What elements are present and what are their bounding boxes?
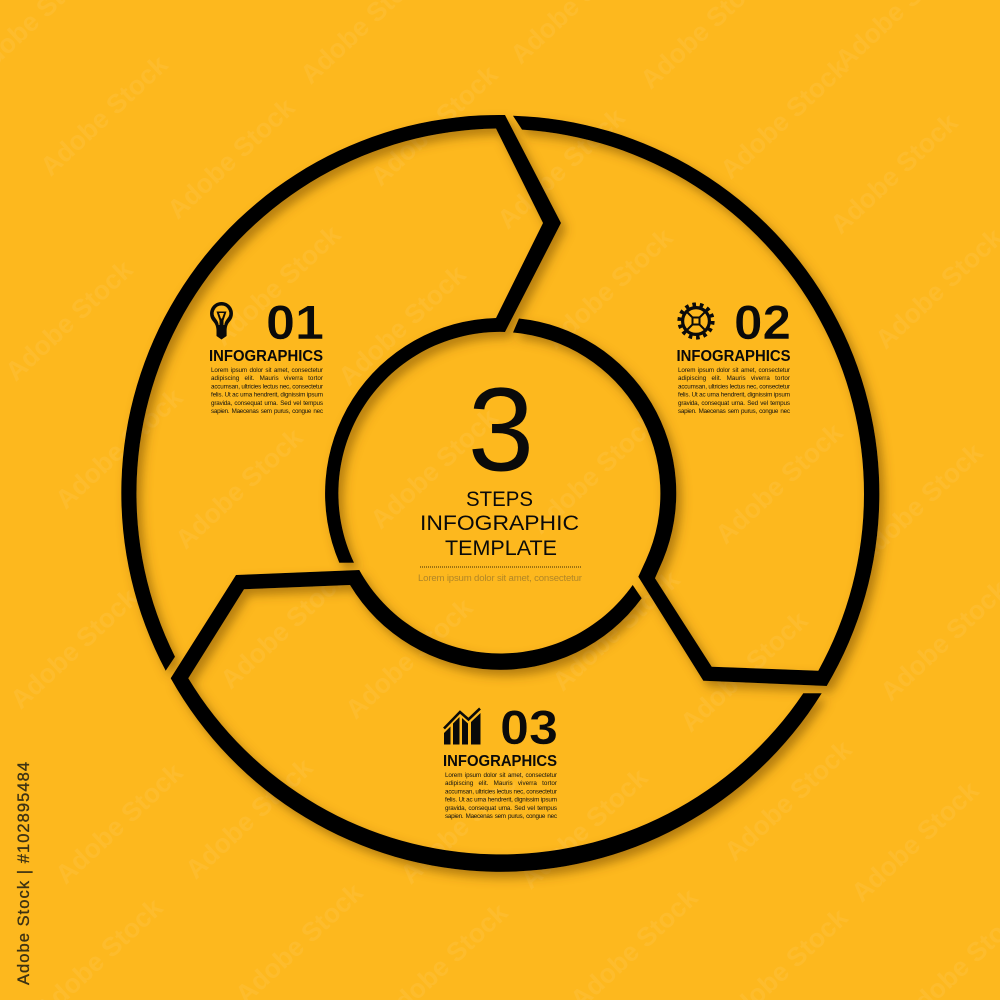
- watermark pattern: Adobe Stock: [49, 382, 189, 515]
- body text: adipiscing elit. Mauris viverra tortor: [211, 375, 323, 382]
- watermark pattern: Adobe Stock: [824, 107, 964, 240]
- watermark pattern: Adobe Stock: [364, 59, 504, 192]
- heading: INFOGRAPHICS: [443, 753, 557, 770]
- body text: gravida, consequat urna. Sed vel tempus: [445, 805, 557, 812]
- watermark pattern: Adobe Stock: [49, 757, 189, 890]
- body text: adipiscing elit. Mauris viverra tortor: [678, 375, 790, 382]
- body text: felis. Ut ac urna hendrerit, dignissim ipsum: [678, 392, 790, 399]
- heading: INFOGRAPHICS: [209, 348, 323, 365]
- segment outline: step 3: [171, 570, 822, 872]
- watermark pattern: Adobe Stock: [34, 49, 174, 182]
- title line: INFOGRAPHIC: INFOGRAPHIC: [420, 511, 579, 535]
- watermark pattern: Adobe Stock: [161, 92, 301, 225]
- watermark pattern: Adobe Stock: [524, 407, 664, 540]
- body text: sapien. Maecenas sem purus, congue nec: [678, 408, 790, 415]
- panel: step 2: [676, 297, 791, 415]
- watermark pattern: Adobe Stock: [364, 402, 504, 535]
- big number 3: 3: [468, 364, 534, 496]
- number 02: 02: [734, 297, 791, 350]
- body text: accumsan, ultricies lectus nec, consectetur: [445, 788, 557, 795]
- body text: Lorem ipsum dolor sit amet, consectetur: [211, 367, 323, 374]
- title line: TEMPLATE: TEMPLATE: [445, 536, 557, 560]
- watermark pattern: Adobe Stock: [339, 592, 479, 725]
- body text: gravida, consequat urna. Sed vel tempus: [211, 400, 323, 407]
- watermark pattern: Adobe Stock: [207, 219, 347, 352]
- watermark pattern: Adobe Stock: [709, 417, 849, 550]
- watermark pattern: Adobe Stock: [169, 422, 309, 555]
- segment outline: step 2: [513, 116, 879, 686]
- watermark pattern: Adobe Stock: [394, 757, 534, 890]
- icon: gear: [679, 304, 713, 338]
- body text: adipiscing elit. Mauris viverra tortor: [445, 780, 557, 787]
- panel: step 3: [443, 702, 558, 820]
- watermark pattern: Adobe Stock: [179, 752, 319, 885]
- watermark pattern: Adobe Stock: [845, 775, 985, 908]
- watermark pattern: Adobe Stock: [546, 564, 686, 697]
- body text: felis. Ut ac urna hendrerit, dignissim ipsum: [445, 797, 557, 804]
- watermark pattern: Adobe Stock: [849, 437, 989, 570]
- watermark pattern: Adobe Stock: [0, 254, 139, 387]
- body text: Lorem ipsum dolor sit amet, consectetur: [445, 772, 557, 779]
- watermark pattern: Adobe Stock: [718, 734, 858, 867]
- icon: rising bar chart: [444, 708, 480, 744]
- heading: INFOGRAPHICS: [676, 348, 790, 365]
- watermark pattern: Adobe Stock: [539, 222, 679, 355]
- body text: sapien. Maecenas sem purus, congue nec: [211, 408, 323, 415]
- body text: sapien. Maecenas sem purus, congue nec: [445, 813, 557, 820]
- watermark pattern: Adobe Stock: [4, 582, 144, 715]
- number 03: 03: [500, 702, 558, 755]
- title line: STEPS: STEPS: [466, 487, 533, 511]
- watermark pattern: Adobe Stock: [514, 762, 654, 895]
- body text: gravida, consequat urna. Sed vel tempus: [678, 400, 790, 407]
- subtitle: Lorem ipsum dolor sit amet, consectetur: [418, 573, 583, 584]
- watermark pattern: Adobe Stock: [714, 52, 854, 185]
- segment outline: step 1: [121, 115, 561, 671]
- body text: accumsan, ultricies lectus nec, consectetur: [678, 383, 790, 390]
- watermark pattern: Adobe Stock: [332, 259, 472, 392]
- body text: [678, 367, 790, 415]
- body text: accumsan, ultricies lectus nec, consectetur: [211, 383, 323, 390]
- body text: [445, 772, 557, 820]
- stock id label: Adobe Stock | #102895484: [15, 762, 33, 985]
- watermark pattern: Adobe Stock: [674, 605, 814, 738]
- watermark pattern: Adobe Stock: [491, 102, 631, 235]
- body text: [211, 367, 323, 415]
- icon: light bulb: [210, 302, 233, 340]
- number 01: 01: [266, 297, 324, 350]
- panel: step 1: [209, 297, 324, 415]
- body text: Lorem ipsum dolor sit amet, consectetur: [678, 367, 790, 374]
- panel: center title: [418, 364, 583, 584]
- body text: felis. Ut ac urna hendrerit, dignissim ipsum: [211, 392, 323, 399]
- watermark pattern: Adobe Stock: [214, 562, 354, 695]
